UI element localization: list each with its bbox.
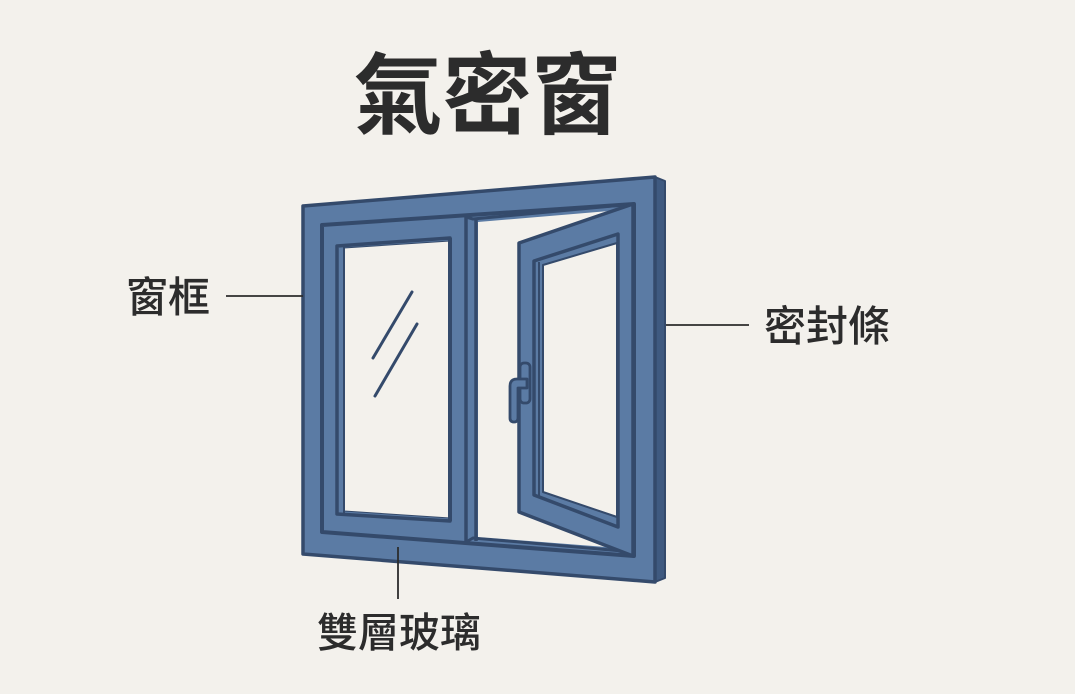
label: window frame: 窗框: [126, 274, 210, 321]
handle: [510, 363, 530, 422]
right jamb line: [632, 204, 636, 556]
left sash glass: [337, 238, 450, 521]
glass glints: [373, 292, 417, 396]
central mullion: [466, 204, 634, 552]
inner frame line: [322, 204, 634, 556]
outer frame: [303, 177, 665, 582]
label: seal strip: 密封條: [764, 303, 890, 350]
label: double glazing: 雙層玻璃: [317, 610, 481, 656]
open sash: [519, 204, 633, 556]
opening behind open sash: [478, 205, 634, 555]
title: 氣密窗: [354, 46, 620, 146]
window illustration: [303, 177, 665, 582]
